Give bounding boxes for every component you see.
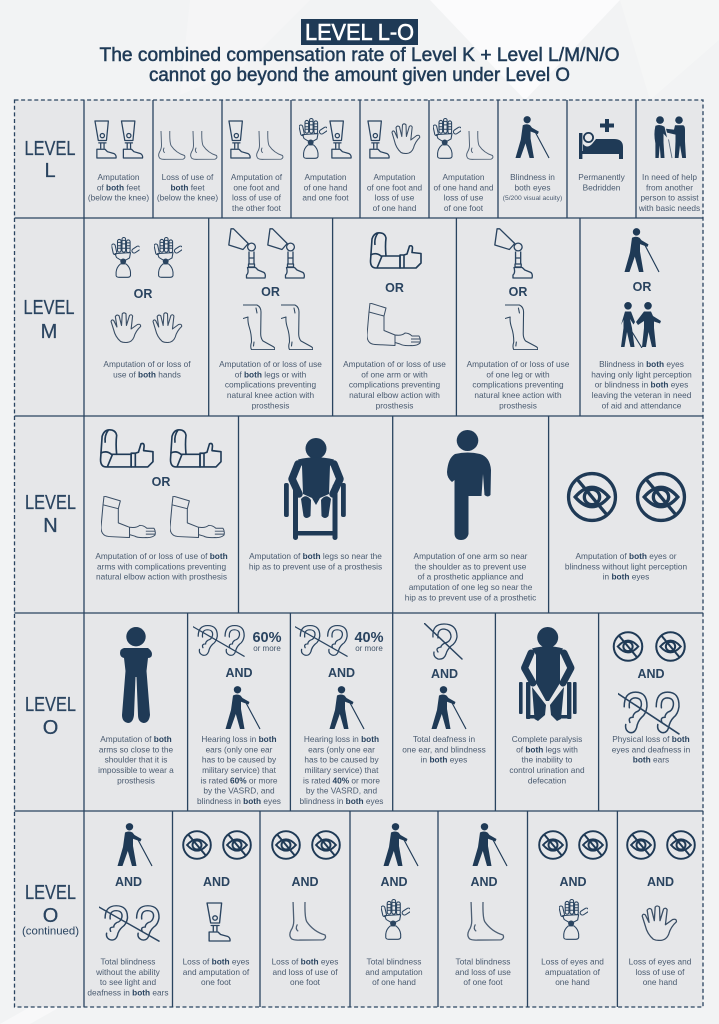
icon: prosthetic arm <box>370 233 421 268</box>
icon: foot pair <box>229 121 283 159</box>
caption: eyes and deafness in <box>612 744 691 754</box>
heading: level N: LEVEL <box>25 492 76 514</box>
icon: blind person <box>624 228 659 272</box>
icon: hand and foot <box>433 118 493 159</box>
caption: loss of use <box>375 193 415 203</box>
caption <box>95 551 228 582</box>
caption: Total blindness <box>456 956 510 966</box>
caption: complications preventing <box>225 380 317 390</box>
heading: level O continued <box>22 882 79 938</box>
subtitle: The combined compensation rate of Level K + Level L/M/N/O <box>100 45 620 66</box>
icon: wheelchair paralysed <box>519 627 577 721</box>
caption: has to be caused by <box>202 755 277 765</box>
caption: Amputation of or loss of use of both <box>95 551 228 561</box>
label: OR <box>633 280 651 294</box>
caption: Total blindness <box>101 956 155 966</box>
label: AND <box>203 875 230 889</box>
icon: hands <box>111 313 182 342</box>
caption: Loss of both eyes <box>272 956 338 966</box>
caption <box>219 359 322 410</box>
caption: the inability to <box>522 755 573 765</box>
caption: in both eyes <box>421 755 467 765</box>
icon: person without arms <box>120 627 152 723</box>
panel: arm and leg <box>405 430 536 602</box>
caption: shoulder that it is <box>105 755 167 765</box>
caption: loss of use <box>444 193 484 203</box>
caption: and loss of use of <box>272 967 338 977</box>
caption: and one foot <box>302 193 349 203</box>
label: AND <box>647 875 674 889</box>
caption: arms so close to the <box>99 744 174 754</box>
panel: both legs near hip <box>249 438 382 571</box>
caption: Amputation of both <box>100 734 172 744</box>
icon: crossed eyes <box>614 632 685 661</box>
caption <box>509 734 585 785</box>
label: OR <box>385 281 404 295</box>
label: AND <box>328 666 355 680</box>
caption: amputation of one leg so near the <box>409 582 533 592</box>
caption: Total blindness <box>367 956 421 966</box>
label: OR <box>509 285 527 299</box>
percent: 40% <box>354 630 384 646</box>
caption: Amputation of or loss of use <box>343 359 446 369</box>
caption: by the VASRD, and <box>306 786 378 796</box>
caption: blindness without light perception <box>565 561 687 571</box>
caption <box>302 172 349 203</box>
caption: (below the knee) <box>157 193 218 203</box>
caption: of one hand <box>373 203 417 213</box>
icon: blind person <box>432 686 466 729</box>
caption: leaving the veteran in need <box>592 390 692 400</box>
heading: level M: LEVEL <box>24 297 74 319</box>
panel: both legs <box>219 229 322 410</box>
caption: from another <box>646 182 693 192</box>
caption <box>103 359 191 380</box>
caption: Amputation of or loss of use <box>467 359 570 369</box>
icon: wheelchair <box>284 438 346 540</box>
caption: natural knee action with <box>474 390 562 400</box>
caption: and amputation <box>365 967 423 977</box>
heading: level O: LEVEL <box>25 694 76 716</box>
panel: foot and loss of hand <box>367 121 423 213</box>
icon: crossed eyes <box>569 474 684 520</box>
label: OR <box>152 475 170 489</box>
caption: without the ability <box>95 967 161 977</box>
label: AND <box>470 875 498 889</box>
icon: bed <box>579 119 623 159</box>
icon: crossed eyes <box>272 831 340 859</box>
icon: foot and hand <box>368 121 420 158</box>
icon: foot <box>290 902 326 940</box>
caption: Physical loss of both <box>612 734 690 744</box>
label: AND <box>225 666 253 680</box>
label: AND <box>380 875 408 889</box>
caption <box>578 172 626 192</box>
label: AND <box>431 667 458 681</box>
caption: of one foot <box>444 203 484 213</box>
caption <box>343 359 446 410</box>
icon: arm <box>367 303 420 346</box>
caption: one foot <box>290 977 321 987</box>
heading: level L <box>24 138 76 182</box>
caption: Complete paralysis <box>512 734 582 744</box>
panel: eyes and deafness <box>612 632 691 765</box>
icon: feet <box>159 131 217 159</box>
panel: eyes and loss of hand <box>627 831 695 987</box>
caption: Amputation of both eyes or <box>576 551 677 561</box>
title badge: LEVEL L-O <box>305 19 414 45</box>
panel: blindness <box>503 116 562 202</box>
icon: ears <box>193 626 244 656</box>
icon: foot <box>468 902 504 940</box>
caption: Amputation of one arm so near <box>414 551 528 561</box>
caption: of one leg or with <box>486 370 550 380</box>
caption: the other foot <box>232 203 282 213</box>
caption <box>565 551 687 582</box>
caption: Blindness in both eyes <box>599 359 684 369</box>
caption <box>638 172 700 213</box>
panel: one leg <box>467 229 570 410</box>
icon: blind person <box>226 686 260 729</box>
percent: 60% <box>252 630 282 646</box>
icon: blind person <box>515 116 549 158</box>
caption: in both eyes <box>603 572 649 582</box>
caption: Amputation of <box>231 172 283 182</box>
panel: blindness with aid <box>591 228 692 410</box>
caption: arms with complications preventing <box>97 561 226 571</box>
icon: blind person <box>118 823 152 866</box>
panel: both arms <box>95 430 228 582</box>
caption: military service) that <box>305 765 379 775</box>
icon: blind person <box>472 823 507 866</box>
caption: natural knee action with <box>227 390 314 400</box>
panel: blindness and deafness <box>87 823 169 998</box>
caption <box>591 359 692 410</box>
caption: Loss of eyes and <box>541 956 604 966</box>
caption <box>402 734 486 765</box>
caption: by the VASRD, and <box>203 786 275 796</box>
percent <box>252 630 282 653</box>
label: AND <box>637 667 665 681</box>
caption: Amputation of both legs so near the <box>249 551 382 561</box>
caption: use of both hands <box>113 370 181 380</box>
caption: Amputation of or loss of <box>103 359 191 369</box>
panel: hand and foot <box>299 118 351 203</box>
caption: natural elbow action with prosthesis <box>96 572 227 582</box>
panel: one arm <box>343 233 446 410</box>
caption: military service) that <box>202 765 277 775</box>
icon: ears <box>99 906 159 941</box>
caption: of both legs or with <box>235 370 307 380</box>
caption: loss of use of <box>636 967 685 977</box>
caption: Loss of use of <box>162 172 214 182</box>
caption <box>231 172 283 213</box>
panel: hearing loss 40 <box>295 626 384 806</box>
icon: crossed eyes <box>183 831 251 859</box>
caption <box>541 956 604 987</box>
heading: level N <box>25 492 76 537</box>
percent: or more <box>355 644 383 653</box>
panel: loss of use both feet <box>157 131 218 203</box>
caption <box>467 359 570 410</box>
heading: level O continued: (continued) <box>22 926 79 938</box>
icon: crossed eyes <box>627 831 695 859</box>
caption: Loss of eyes and <box>629 956 692 966</box>
caption: of one foot and <box>367 182 423 192</box>
caption: or blindness in both eyes <box>595 380 688 390</box>
caption: complications preventing <box>472 380 564 390</box>
panel: both arms near shoulder <box>98 627 174 785</box>
caption: Hearing loss in both <box>304 734 379 744</box>
caption: ampuatation of <box>545 967 601 977</box>
panel: both hands <box>103 237 191 380</box>
caption: Amputation <box>443 172 485 182</box>
caption: Amputation <box>98 172 140 182</box>
caption: Blindness in <box>510 172 555 182</box>
panel: needs help <box>638 116 700 213</box>
icon: prosthetic hand <box>381 899 412 939</box>
heading: level M <box>24 297 74 343</box>
caption: both feet <box>170 182 205 192</box>
panel: eyes and hand amputation <box>539 831 607 987</box>
panel: eyes and loss of foot <box>272 831 340 987</box>
panel: both eyes <box>565 474 687 582</box>
caption: is rated 60% or more <box>200 775 278 785</box>
icon: two people <box>621 302 661 348</box>
caption: prosthesis <box>117 775 155 785</box>
caption: and amputation of <box>183 967 250 977</box>
caption: hip as to prevent use of a prosthesis <box>249 561 382 571</box>
icon: arms <box>101 496 224 538</box>
panel: bedridden <box>578 119 626 192</box>
caption: one foot and <box>233 182 280 192</box>
caption <box>612 734 691 765</box>
caption <box>455 956 511 987</box>
caption <box>157 172 218 203</box>
icon: ears <box>618 692 679 734</box>
caption: of aid and attendance <box>602 400 682 410</box>
caption: Permanently <box>578 172 626 182</box>
caption: of both feet <box>97 182 141 192</box>
panel: eyes and foot <box>183 831 251 987</box>
caption: natural elbow action with <box>349 390 440 400</box>
icon: hand and foot <box>299 118 351 158</box>
label: OR <box>134 287 152 301</box>
caption <box>434 172 494 213</box>
icon: prosthetic arms <box>101 430 221 467</box>
panel: paralysis <box>509 627 585 785</box>
caption: loss of use of <box>232 193 282 203</box>
icon: leg <box>505 305 538 350</box>
caption: Total deafness in <box>413 734 476 744</box>
caption <box>183 956 250 987</box>
caption: having only light perception <box>591 370 692 380</box>
heading: level O: O <box>43 717 58 739</box>
caption: to see light and <box>100 977 157 987</box>
caption: prosthesis <box>376 400 413 410</box>
caption <box>272 956 338 987</box>
caption <box>87 956 169 998</box>
caption: one hand <box>643 977 678 987</box>
panel: both feet <box>88 121 149 203</box>
heading: level O continued: LEVEL <box>25 882 76 904</box>
caption: of one hand and <box>434 182 494 192</box>
caption: Loss of both eyes <box>183 956 249 966</box>
icon: prosthetic leg <box>495 229 532 278</box>
caption: Amputation <box>305 172 347 182</box>
icon: prosthetic hand <box>559 899 590 939</box>
caption <box>367 172 423 213</box>
icon: legs <box>243 305 313 350</box>
caption <box>88 172 149 203</box>
icon: prosthetic foot <box>207 903 230 941</box>
caption: defecation <box>528 775 567 785</box>
caption <box>249 551 382 571</box>
icon: amputee <box>447 430 491 540</box>
caption: of both legs with <box>516 744 578 754</box>
caption <box>629 956 692 987</box>
icon: blind person <box>330 686 364 729</box>
caption: In need of help <box>642 172 697 182</box>
icon: ear <box>424 624 462 659</box>
caption: both ears <box>633 755 669 765</box>
label: OR <box>261 285 280 299</box>
icon: blind person <box>384 823 418 866</box>
caption: of one foot <box>463 977 503 987</box>
caption: prosthesis <box>499 400 537 410</box>
caption: one ear, and blindness <box>402 744 486 754</box>
icon: helper <box>654 116 686 158</box>
caption: (below the knee) <box>88 193 149 203</box>
panel: blindness and hand <box>365 823 423 987</box>
caption: of one hand <box>372 977 416 987</box>
heading: level N: N <box>43 515 58 537</box>
label: AND <box>115 875 142 889</box>
label: AND <box>559 875 587 889</box>
percent <box>354 630 384 653</box>
caption: is rated 40% or more <box>303 775 380 785</box>
label: AND <box>291 875 319 889</box>
panel: one foot and loss of other <box>229 121 283 213</box>
caption: of one hand <box>304 182 348 192</box>
heading: level L: L <box>44 160 56 182</box>
caption: control urination and <box>509 765 585 775</box>
caption: and loss of use <box>455 967 511 977</box>
caption: one hand <box>555 977 590 987</box>
caption: Hearing loss in both <box>201 734 277 744</box>
caption: ears (only one ear <box>206 744 273 754</box>
caption: blindness in both eyes <box>197 796 281 806</box>
caption <box>98 734 174 785</box>
icon: prosthetic legs <box>229 229 304 278</box>
caption: one foot <box>201 977 232 987</box>
caption <box>405 551 536 602</box>
heading: level O <box>25 694 76 739</box>
icon: hand <box>642 906 676 940</box>
caption: prosthesis <box>252 400 289 410</box>
caption <box>365 956 423 987</box>
caption: person to assist <box>640 193 699 203</box>
icon: ears <box>295 626 347 656</box>
caption: deafness in both ears <box>87 988 169 998</box>
caption: with basic needs <box>638 203 700 213</box>
caption: (5/200 visual acuity) <box>503 195 562 202</box>
icon: crossed eyes <box>539 831 607 859</box>
caption: both eyes <box>515 182 550 192</box>
caption: impossible to wear a <box>98 765 174 775</box>
panel: hearing loss 60 <box>193 626 282 806</box>
caption: of a prosthetic appliance and <box>417 572 524 582</box>
caption <box>197 734 281 806</box>
caption: the shoulder as to prevent use <box>415 561 527 571</box>
caption: ears (only one ear <box>308 744 375 754</box>
caption: blindness in both eyes <box>300 796 383 806</box>
heading: level L: LEVEL <box>24 138 76 160</box>
subtitle: cannot go beyond the amount given under Level O <box>149 65 570 86</box>
caption: hip as to prevent use of a prosthetic <box>405 592 536 602</box>
caption: has to be caused by <box>304 755 379 765</box>
caption: of one arm or with <box>361 370 428 380</box>
caption <box>503 172 562 202</box>
caption: complications preventing <box>349 380 441 390</box>
heading: level M: M <box>41 321 57 343</box>
caption: Amputation of or loss of use <box>219 359 322 369</box>
percent: or more <box>253 644 281 653</box>
icon: prosthetic hands <box>111 237 183 277</box>
subtitle <box>100 45 620 86</box>
caption <box>300 734 383 806</box>
caption: Bedridden <box>583 182 621 192</box>
panel: deafness in one ear <box>402 624 486 765</box>
caption: Amputation <box>374 172 416 182</box>
panel: hand and loss of foot <box>433 118 494 213</box>
heading: level O continued: O <box>43 905 58 927</box>
panel: blindness and foot <box>455 823 511 987</box>
icon: prosthetic feet <box>95 121 143 158</box>
